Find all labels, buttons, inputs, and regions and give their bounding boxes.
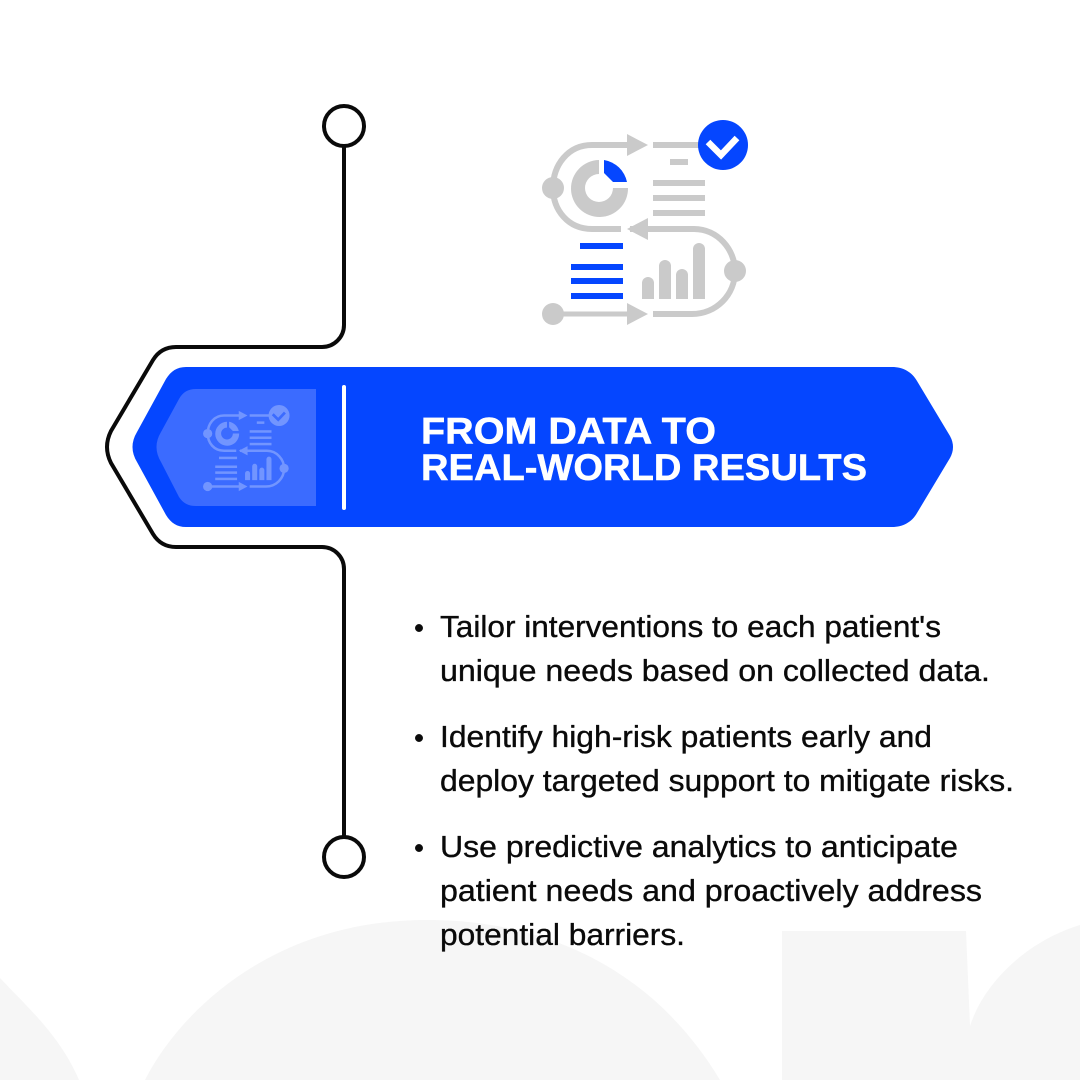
- banner heading: REAL-WORLD RESULTS: [421, 447, 867, 488]
- bottom node: [324, 837, 364, 877]
- donut chart: [571, 160, 628, 217]
- banner small icon: [203, 405, 290, 491]
- banner heading: FROM DATA TO: [421, 410, 716, 452]
- timeline connector: [107, 106, 364, 877]
- banner divider: [342, 385, 346, 510]
- check badge: [698, 120, 748, 170]
- bullet 1: unique needs based on collected data.: [440, 653, 990, 688]
- banner heading: [421, 410, 867, 488]
- bullet 2: [415, 719, 1014, 798]
- banner icon panel: [156, 389, 316, 506]
- bullet 3: patient needs and proactively address: [440, 873, 982, 908]
- title banner: [132, 367, 953, 527]
- bullet 3: potential barriers.: [440, 917, 685, 952]
- flow paths: [553, 145, 735, 314]
- flow arrowheads: [542, 134, 746, 325]
- bullet 3: Use predictive analytics to anticipate: [440, 829, 958, 864]
- bullet 2: Identify high-risk patients early and: [440, 719, 932, 754]
- bullet 2: deploy targeted support to mitigate risks.: [440, 763, 1014, 798]
- background shapes: [0, 920, 1080, 1080]
- main icon: data cycle: [542, 120, 748, 325]
- bullet list: [415, 609, 1014, 952]
- gray text lines: [653, 142, 705, 216]
- top node: [324, 106, 364, 146]
- blue text lines: [571, 243, 623, 299]
- bullet 3: [415, 829, 982, 952]
- bullet 1: [415, 609, 990, 688]
- bullet 1: Tailor interventions to each patient's: [440, 609, 941, 644]
- bar chart: [642, 243, 705, 299]
